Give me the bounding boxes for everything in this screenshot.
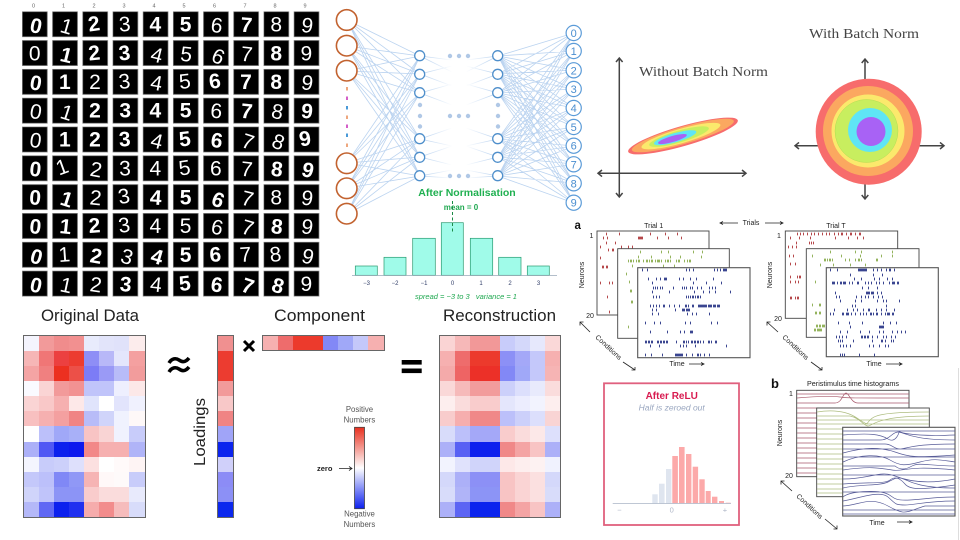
MNIST digit grid: [22, 4, 320, 299]
multiply sign: [244, 341, 254, 351]
green raster: [618, 249, 729, 338]
digit cells: 02457: [28, 12, 253, 39]
matrix section headings: [41, 307, 556, 325]
elongated contour ellipses: [625, 111, 741, 161]
with batch norm chart: [795, 27, 944, 199]
digit cells: 01456: [29, 186, 228, 213]
histogram stack title: Peristimulus time histograms: [807, 381, 900, 388]
axis numbers: 3: [537, 281, 541, 287]
digit cells: 1238: [58, 41, 282, 68]
right stack: trial T: [785, 231, 938, 357]
output layer nodes: [566, 25, 581, 210]
red PSTH: [797, 390, 909, 477]
histogram heading: After Normalisation: [418, 187, 516, 199]
hidden to output connections: [498, 33, 574, 203]
trial labels: Trial T: [826, 223, 846, 230]
equals sign: [402, 360, 422, 373]
positive label: Positive: [346, 405, 373, 414]
positive label: Numbers: [344, 416, 375, 424]
digit cells: 1234567: [53, 155, 254, 183]
digit cells: 234579: [89, 100, 314, 124]
heatmap: reconstruction: [439, 335, 560, 518]
green PSTH: [817, 408, 929, 497]
neurons and condition labels: Neurons: [579, 261, 586, 288]
output labels: 8: [571, 178, 577, 190]
PSTH labels: Neurons: [777, 419, 784, 446]
mean dashed line: [452, 201, 454, 232]
neurons and condition labels: [579, 233, 902, 370]
neurons and condition labels: 20: [586, 313, 594, 320]
output labels: 2: [571, 65, 577, 77]
positive bars: [672, 447, 731, 503]
zero marker: zero: [317, 464, 333, 473]
digit cells: 123569: [59, 127, 313, 153]
digit cells: 0128: [28, 214, 284, 239]
baseline: [352, 274, 557, 276]
panel a: spike rasters: [574, 220, 938, 370]
after normalisation histogram: [352, 187, 557, 301]
neurons and condition labels: 1: [777, 233, 781, 240]
neurons and condition labels: Conditions: [594, 334, 623, 362]
output labels: [571, 28, 577, 210]
neurons and condition labels: Neurons: [767, 261, 774, 288]
axis numbers: −2: [392, 281, 399, 287]
digit column headers: 0123456789: [32, 4, 307, 10]
output labels: 0: [571, 28, 577, 40]
red raster: [597, 231, 709, 315]
spread caption: spread = −3 to 3 variance = 1: [415, 292, 517, 301]
output labels: 5: [571, 122, 577, 134]
colour bar: [354, 427, 364, 509]
panel subtitle: Half is zeroed out: [639, 403, 705, 413]
axes: [598, 58, 746, 197]
matrix section headings: Component: [274, 307, 365, 325]
axis numbers: 1: [479, 281, 483, 287]
approximately equals sign: [169, 358, 189, 372]
output labels: 6: [571, 141, 577, 153]
axis numbers: [363, 281, 541, 287]
output labels: 4: [571, 103, 577, 115]
digit cells: 1249: [58, 273, 312, 298]
hidden layer nodes: [415, 51, 503, 181]
digit cells: 0168: [28, 100, 285, 126]
PSTH labels: 20: [785, 473, 793, 480]
left stack: trial 1: [597, 231, 750, 358]
axis numbers: −1: [421, 281, 428, 287]
neural network diagram: [336, 10, 581, 224]
output labels: 9: [571, 198, 577, 210]
PSTH labels: Time: [869, 520, 885, 527]
trials arrows: [720, 222, 783, 224]
heatmap: component: [262, 334, 384, 351]
after ReLU panel: [604, 383, 739, 525]
panel letter b: b: [771, 376, 779, 391]
hidden layer ellipsis dots: [418, 54, 500, 178]
neurons and condition labels: 20: [774, 316, 782, 323]
digit cells: 13789: [58, 243, 316, 270]
axis labels: −0+: [617, 506, 728, 514]
output labels: 3: [571, 84, 577, 96]
zeroed bars: [652, 469, 671, 503]
digit cells: [22, 11, 320, 299]
digit cells: 345679: [117, 214, 315, 241]
blue raster: [826, 268, 938, 357]
neurons and condition labels: Time: [669, 361, 685, 368]
panel b: peristimulus time histograms: [771, 376, 955, 529]
digit cells: 13689: [58, 13, 315, 40]
digit cells: 0478: [28, 129, 287, 155]
input to hidden connections: [347, 20, 420, 214]
digit cells: 02456: [27, 243, 222, 270]
matrix section headings: Reconstruction: [443, 307, 556, 325]
heatmap: original data: [23, 335, 146, 518]
matrix section headings: Original Data: [41, 307, 140, 325]
fading connection stubs: [420, 56, 498, 178]
PSTH labels: 1: [789, 391, 793, 398]
circular contours: [816, 79, 922, 185]
digit cells: 045679: [29, 43, 312, 70]
blue raster: [638, 268, 750, 358]
digit cells: 23459: [89, 70, 315, 96]
zero arrow: [339, 466, 352, 470]
trial labels: [644, 220, 846, 230]
neurons and condition labels: 1: [590, 233, 594, 240]
title: Without Batch Norm: [639, 65, 768, 80]
axes: [795, 59, 944, 199]
negative label: Negative: [344, 510, 375, 518]
without batch norm chart: [598, 58, 768, 197]
output labels: 7: [571, 159, 577, 171]
output labels: 1: [571, 46, 577, 58]
heatmap: loadings: [217, 335, 234, 518]
digit cells: 035678: [28, 272, 287, 299]
bars: [355, 223, 549, 275]
PSTH labels: Conditions: [795, 493, 824, 521]
panel letter a: a: [574, 220, 582, 232]
red raster: [785, 231, 898, 318]
green raster: [806, 249, 919, 337]
loadings label: Loadings: [192, 398, 209, 466]
panel title: After ReLU: [646, 391, 698, 402]
digit cells: 23789: [89, 185, 315, 212]
mean label: mean = 0: [444, 203, 479, 212]
colour scale legend: [317, 405, 375, 529]
PSTH labels: [777, 391, 912, 529]
trial labels: Trials: [743, 220, 760, 227]
axis line: [613, 502, 731, 504]
input layer nodes: [336, 10, 357, 224]
negative label: Numbers: [344, 520, 375, 529]
panel frame: [604, 383, 739, 525]
digit cells: 089: [28, 158, 316, 183]
neurons and condition labels: Conditions: [781, 334, 810, 362]
digit cells: 01678: [28, 70, 282, 96]
neurons and condition labels: Time: [866, 361, 882, 368]
axis numbers: −3: [363, 281, 371, 287]
axis numbers: 2: [508, 281, 512, 287]
title: With Batch Norm: [809, 27, 919, 42]
input ellipsis dashes: [346, 87, 348, 147]
blue PSTH: [843, 427, 955, 516]
trial labels: Trial 1: [644, 223, 663, 230]
axis numbers: 0: [451, 281, 455, 287]
right edge rule: [958, 368, 960, 540]
